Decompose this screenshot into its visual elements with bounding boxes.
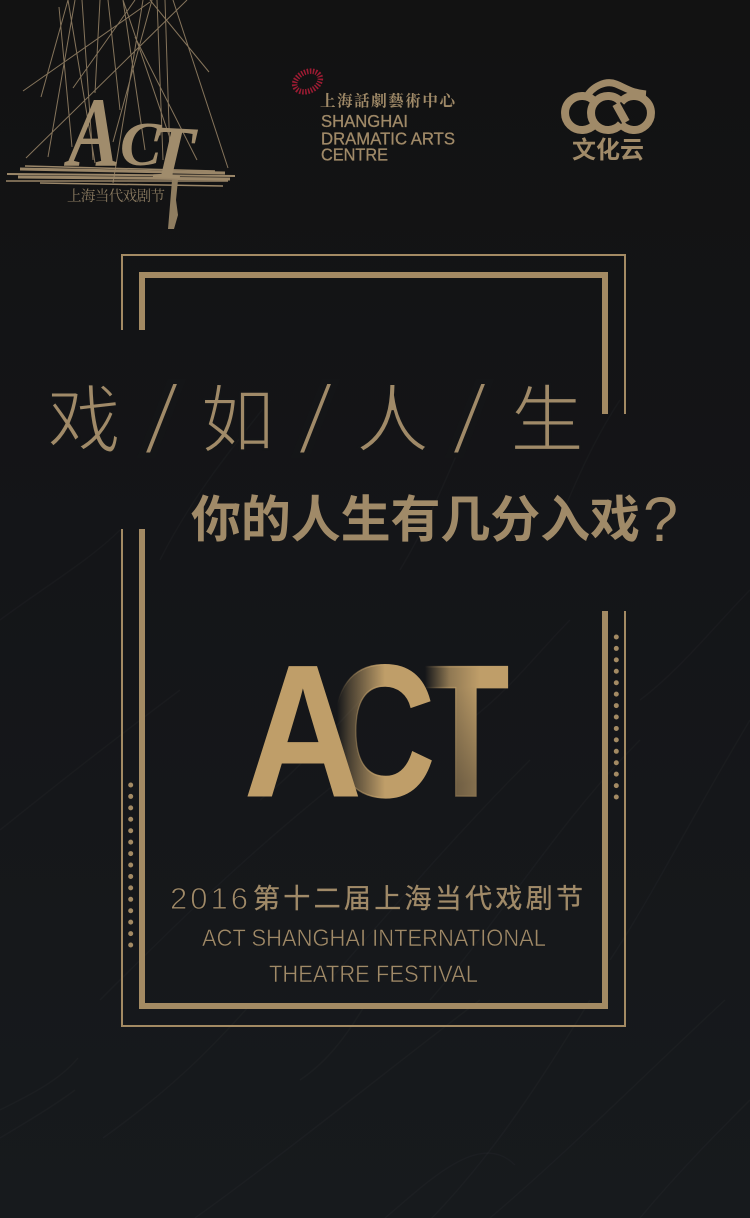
brush letters: C <box>120 111 162 179</box>
headline: / <box>295 364 336 476</box>
english name: DRAMATIC ARTS <box>321 128 455 148</box>
calligraphy name: 上海話劇藝術中心 <box>320 91 457 110</box>
festival title chinese: 2016 <box>170 881 248 916</box>
headline: / <box>141 364 182 476</box>
big ACT wordmark: A <box>244 627 362 837</box>
headline: 人 <box>356 379 430 462</box>
outer frame bottom <box>122 529 625 1026</box>
big ACT wordmark <box>244 626 509 837</box>
headline: / <box>449 364 490 476</box>
brush letters: A <box>63 77 120 188</box>
brush letters: T <box>146 110 199 196</box>
headline: 生 <box>510 379 584 462</box>
brush letters <box>63 77 199 196</box>
cloud rings <box>565 83 651 130</box>
festival title chinese <box>170 881 583 916</box>
festival title chinese: 第十二届上海当代戏剧节 <box>253 884 583 914</box>
logo: ACT brush mark <box>6 0 235 229</box>
logo: Wenhua Yun cloud <box>565 83 651 164</box>
dotted line left <box>128 785 133 946</box>
T stem shade <box>452 687 478 797</box>
festival title english: THEATRE FESTIVAL <box>269 961 478 988</box>
inner frame top <box>142 275 605 414</box>
inner frame bottom <box>142 529 605 1006</box>
big ACT wordmark: C <box>328 626 435 836</box>
cloud name: 文化云 <box>572 136 644 164</box>
logo lines <box>23 0 228 183</box>
red hatched ring <box>291 67 324 96</box>
headline: 如 <box>200 379 274 462</box>
dotted line right <box>614 637 619 798</box>
english name: SHANGHAI <box>321 111 408 131</box>
subheadline: ? <box>643 485 678 555</box>
subheadline: 你的人生有几分入戏 <box>191 492 640 548</box>
festival title english: ACT SHANGHAI INTERNATIONAL <box>202 925 546 952</box>
outer frame top <box>122 255 625 414</box>
english name: CENTRE <box>321 144 388 164</box>
big ACT wordmark: T <box>423 626 509 837</box>
brush drip <box>168 180 178 229</box>
brush stroke base <box>6 166 235 186</box>
logo subtitle: 上海当代戏剧节 <box>67 187 165 205</box>
english name <box>321 111 455 164</box>
headline: 戏 <box>47 379 121 462</box>
logo: Shanghai Dramatic Arts Centre <box>291 67 457 164</box>
festival title english <box>202 925 546 988</box>
headline <box>47 364 584 476</box>
